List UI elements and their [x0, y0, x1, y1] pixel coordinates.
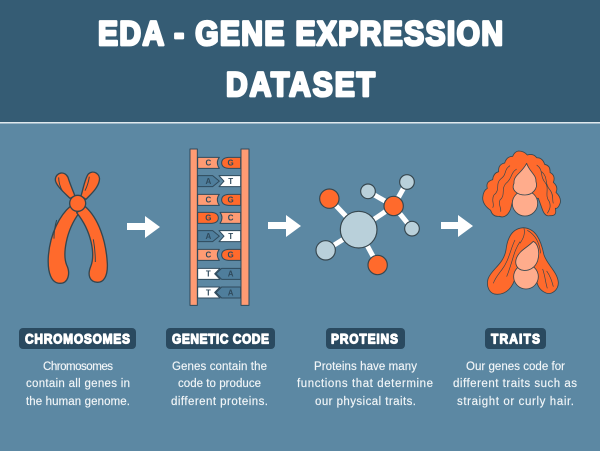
text: traits description [453, 361, 577, 408]
label: traits: TRAITS [491, 331, 540, 347]
text: chromosomes description: Chromosomes [43, 361, 113, 373]
rung: C-G: C [205, 196, 211, 205]
icon: protein molecule [316, 175, 419, 275]
label: genetic code: GENETIC CODE [172, 331, 269, 347]
text: proteins description [297, 361, 433, 408]
text: chromosomes description: contain all genes in [26, 378, 130, 390]
text: genetic code description: code to produce [178, 378, 261, 390]
label: chromosomes: CHROMOSOMES [25, 331, 130, 347]
label: proteins: PROTEINS [331, 331, 398, 347]
rung: C-G: G [228, 196, 234, 205]
rung: A-T [198, 176, 241, 187]
text: proteins description: Proteins have many [314, 361, 417, 373]
label: genetic code [166, 328, 275, 349]
text: proteins description: our physical traits. [315, 396, 416, 408]
rung: T-A [198, 287, 241, 298]
rung: A-T: A [205, 177, 211, 186]
icon: curly hair [483, 151, 560, 217]
rung: G-C: C [228, 214, 234, 223]
rung: T-A: A [228, 270, 234, 279]
label: traits [485, 328, 546, 349]
rung: C-G [198, 249, 241, 260]
text: proteins description: functions that determine [297, 378, 433, 390]
icon: chromosome [48, 172, 107, 283]
rung: G-C [198, 212, 241, 223]
arrow 3 [441, 215, 473, 237]
rung: A-T: T [228, 177, 233, 186]
text: chromosomes description: the human genome. [26, 396, 130, 408]
text: genetic code description [171, 361, 268, 408]
title: EDA - GENE EXPRESSION [98, 14, 503, 52]
label: proteins [326, 328, 405, 349]
text: chromosomes description [26, 361, 130, 408]
rung: T-A: A [228, 288, 234, 297]
title [98, 14, 503, 103]
header band [0, 0, 600, 122]
rung: A-T: A [205, 232, 211, 241]
rung: C-G [198, 194, 241, 205]
rung: C-G: G [228, 251, 234, 260]
text: genetic code description: Genes contain the [172, 361, 267, 373]
label: chromosomes [19, 328, 136, 349]
DNA rail right [241, 149, 249, 305]
rung: C-G: C [205, 251, 211, 260]
text: traits description: different traits such as [453, 378, 577, 390]
rung: C-G: G [228, 159, 234, 168]
icon: straight hair [487, 228, 558, 294]
rung: A-T [198, 231, 241, 242]
rung: G-C: G [205, 214, 211, 223]
title: DATASET [226, 65, 375, 103]
rung: T-A [198, 268, 241, 279]
rung: T-A: T [206, 288, 211, 297]
text: traits description: straight or curly hair. [457, 396, 574, 408]
arrow 1 [127, 216, 160, 238]
rung: C-G: C [205, 159, 211, 168]
icon: DNA genetic code [190, 149, 249, 305]
text: genetic code description: different proteins. [171, 396, 268, 408]
text: traits description: Our genes code for [466, 361, 565, 373]
rung: T-A: T [206, 270, 211, 279]
rung: C-G [198, 157, 241, 168]
rung: A-T: T [228, 232, 233, 241]
arrow 2 [268, 215, 301, 237]
DNA rail left [190, 149, 197, 305]
